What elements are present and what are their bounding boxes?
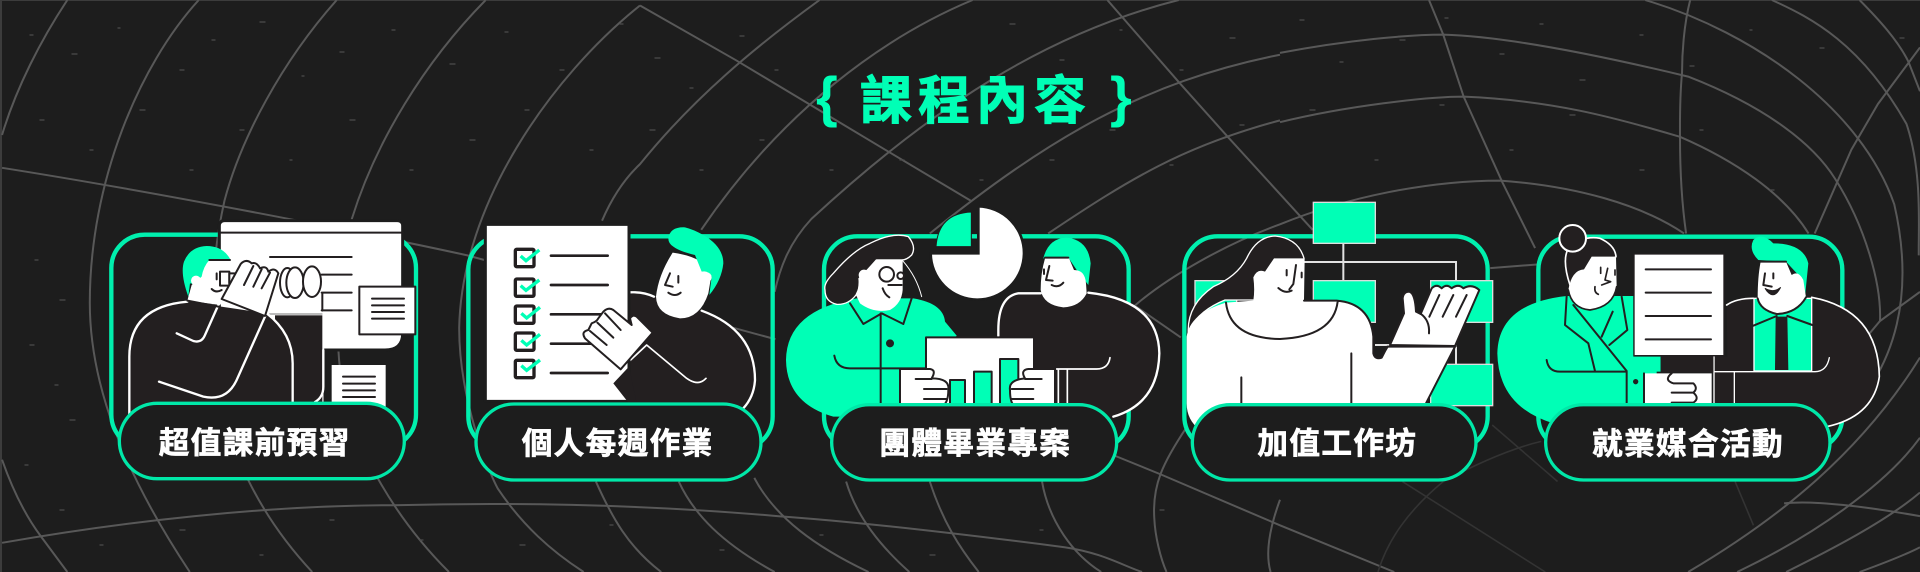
illustration: right man bbox=[1713, 237, 1879, 427]
label pill: 超值課前預習 bbox=[159, 426, 351, 460]
title: course content bbox=[816, 65, 1132, 131]
title: course content: } bbox=[1110, 65, 1132, 128]
label pill bbox=[476, 404, 761, 480]
illustration: hand bbox=[583, 309, 653, 369]
illustration: man head bbox=[656, 227, 723, 318]
illustration: document and handshake bbox=[1634, 254, 1724, 407]
label pill bbox=[119, 403, 404, 479]
label pill: 就業媒合活動 bbox=[1592, 428, 1784, 462]
illustration: raised hand bbox=[1390, 286, 1479, 346]
label pill bbox=[832, 405, 1117, 480]
frame bbox=[111, 235, 416, 448]
illustration: woman bbox=[1187, 236, 1457, 430]
illustration: man body bbox=[613, 292, 755, 408]
label pill: 個人每週作業 bbox=[522, 427, 714, 461]
frame bbox=[468, 236, 773, 450]
chart: pie bbox=[931, 206, 1024, 300]
panel: workshops bbox=[1184, 202, 1493, 480]
illustration: bar chart board bbox=[926, 337, 1034, 407]
illustration: document board bbox=[219, 221, 403, 403]
frame bbox=[1538, 237, 1842, 450]
title: course content: { bbox=[816, 65, 838, 128]
frame bbox=[1184, 236, 1488, 450]
illustration: man with binoculars bbox=[129, 246, 321, 423]
label pill bbox=[1546, 405, 1830, 480]
title: course content: 課程內容 bbox=[860, 73, 1092, 131]
icon: note lower bbox=[332, 365, 386, 407]
icon: note upper bbox=[359, 287, 415, 334]
panel: pre-course study bbox=[111, 221, 416, 479]
illustration: right person bbox=[998, 238, 1159, 417]
illustration: checklist bbox=[485, 224, 637, 403]
label pill: 加值工作坊 bbox=[1257, 427, 1417, 461]
label pill bbox=[1192, 405, 1476, 480]
illustration: hands bbox=[900, 369, 1055, 407]
illustration: left person bbox=[786, 235, 957, 417]
panel: weekly assignments bbox=[468, 224, 773, 480]
panel: group graduation project bbox=[786, 206, 1159, 480]
label pill: 團體畢業專案 bbox=[879, 427, 1071, 461]
panel: career matching event bbox=[1497, 225, 1879, 480]
frame bbox=[824, 236, 1129, 450]
chart: org chart bbox=[1195, 202, 1493, 406]
illustration: left woman bbox=[1497, 225, 1661, 423]
